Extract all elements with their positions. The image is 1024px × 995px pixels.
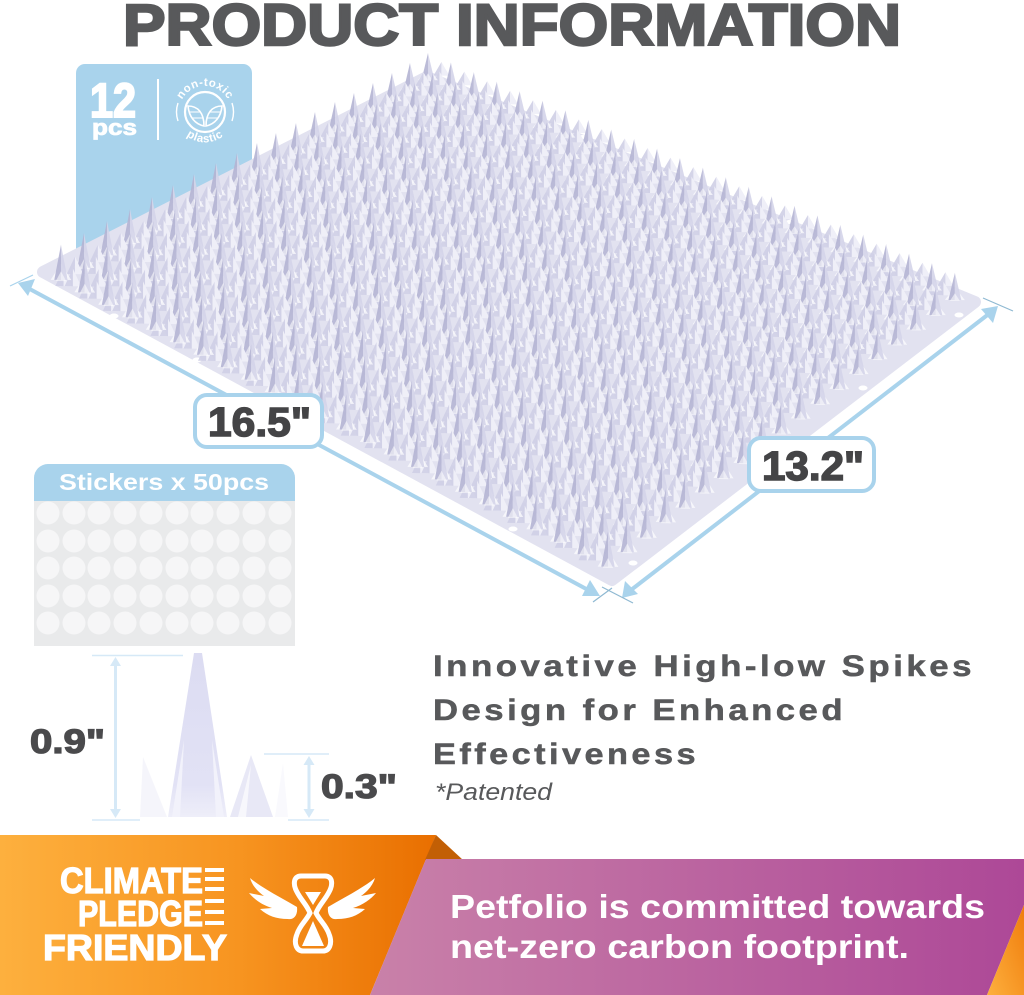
feature text: Design for Enhanced	[433, 694, 846, 727]
commitment text	[450, 888, 985, 965]
spiked mat	[43, 53, 975, 580]
sticker heading: Stickers x 50pcs	[59, 469, 269, 495]
commitment text: net-zero carbon footprint.	[450, 928, 909, 965]
patented note: *Patented	[435, 779, 553, 806]
icon: non-toxic plastic: plastic	[186, 131, 222, 142]
icon: non-toxic plastic	[176, 78, 234, 142]
feature text: Effectiveness	[433, 738, 699, 771]
panel: stickers	[34, 464, 295, 646]
climate pledge text	[43, 860, 227, 968]
arrow: 16.5 inch dimension	[10, 275, 612, 602]
icon: non-toxic plastic: non-toxic	[177, 78, 232, 99]
spike height diagram	[30, 653, 397, 820]
label: 13.2 inches	[749, 438, 874, 491]
label: 16.5 inches	[195, 395, 322, 447]
label: 16.5 inches: 16.5"	[208, 399, 311, 445]
quantity: 12 pcs: 12	[90, 75, 136, 128]
icon: winged hourglass logo	[249, 876, 376, 951]
quantity: 12 pcs: pcs	[92, 115, 137, 140]
climate pledge text: FRIENDLY	[43, 927, 227, 968]
commitment text: Petfolio is committed towards	[450, 888, 985, 925]
panel: pack count badge	[76, 64, 252, 248]
label: 0.3 inches: 0.3"	[321, 768, 397, 806]
feature text: Innovative High-low Spikes	[433, 650, 975, 683]
feature text	[433, 650, 975, 806]
label: 0.9 inches: 0.9"	[30, 723, 105, 761]
arrow: 13.2 inch dimension	[602, 298, 1013, 603]
label: 13.2 inches: 13.2"	[762, 443, 864, 489]
banner	[0, 835, 1024, 995]
sticker dots	[36, 502, 292, 634]
climate pledge text: CLIMATE	[60, 860, 203, 901]
banner: purple panel	[370, 859, 1024, 995]
banner: orange panel	[0, 835, 436, 995]
climate pledge text: PLEDGE	[78, 893, 203, 934]
